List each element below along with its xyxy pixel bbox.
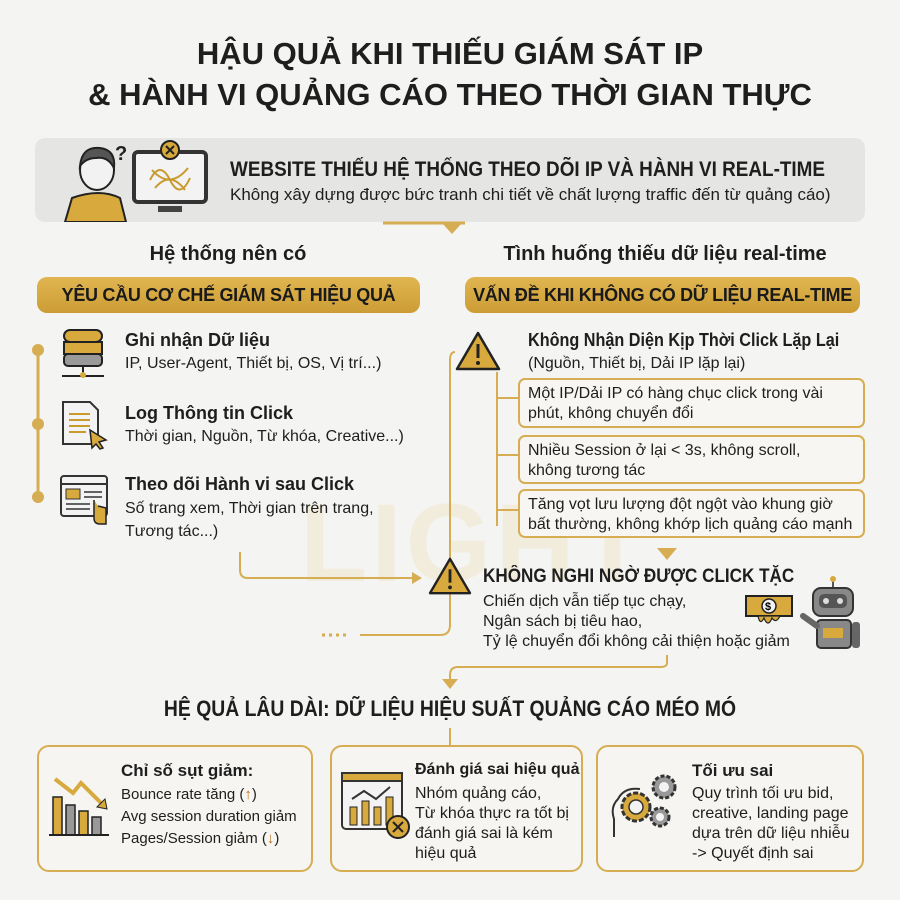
card: metrics decline: Chỉ số sụt giảm: <box>121 761 253 780</box>
box: short sessions: không tương tác <box>528 462 645 479</box>
box: traffic spikes <box>518 489 865 538</box>
icon: head with gears <box>612 774 676 837</box>
item: data logging <box>62 329 381 378</box>
heading: long-term consequences: HỆ QUẢ LÂU DÀI: DỮ LIỆU HIỆU SUẤT QUẢNG CÁO MÉO MÓ <box>164 696 736 721</box>
heading: right column: Tình huống thiếu dữ liệu real-time <box>503 243 827 265</box>
card: wrong optimisation: creative, landing page <box>692 805 849 822</box>
card: wrong evaluation: Nhóm quảng cáo, <box>415 785 541 802</box>
icon: warning <box>456 332 500 370</box>
watermark: LIGHT <box>300 482 650 605</box>
icon: confused person: ? <box>115 143 127 165</box>
item: repeated click detection: (Nguồn, Thiết bị, Dải IP lặp lại) <box>528 355 745 372</box>
block: click fraud not suspected <box>428 558 794 650</box>
item: data logging: IP, User-Agent, Thiết bị, OS, Vị trí...) <box>125 355 381 372</box>
icon: melting money: $ <box>765 601 771 613</box>
item: click logging <box>62 401 404 450</box>
item: post-click behaviour: Theo dõi Hành vi sau Click <box>125 474 354 494</box>
icon: browser with hand <box>60 475 108 525</box>
block: click fraud not suspected: Chiến dịch vẫn tiếp tục chạy, <box>483 593 686 610</box>
box: many clicks per IP: phút, không chuyển đổi <box>528 405 693 422</box>
block: click fraud not suspected: Ngân sách bị tiêu hao, <box>483 613 642 630</box>
icon: confused person <box>64 143 127 222</box>
card: wrong optimisation: dựa trên dữ liệu nhiễu <box>692 825 850 842</box>
item: click logging: Thời gian, Nguồn, Từ khóa, Creative...) <box>125 428 404 445</box>
box: many clicks per IP: Một IP/Dải IP có hàng chục click trong vài <box>528 385 823 402</box>
icon: monitor with tangled lines <box>132 140 208 212</box>
box: traffic spikes: bất thường, không khớp lịch quảng cáo mạnh <box>528 516 852 533</box>
card: wrong optimisation: Tối ưu sai <box>692 761 773 780</box>
item: repeated click detection: Không Nhận Diện Kịp Thời Click Lặp Lại <box>528 330 839 350</box>
connector to consequences <box>442 655 668 689</box>
item: repeated click detection <box>456 330 839 372</box>
card: wrong evaluation: hiệu quả <box>415 845 476 862</box>
card: wrong evaluation: Đánh giá sai hiệu quả <box>415 761 579 778</box>
icon: melting money <box>745 595 793 624</box>
block: click fraud not suspected: Tỷ lệ chuyển đổi không cải thiện hoặc giảm <box>483 633 790 650</box>
icon: warning <box>428 558 472 594</box>
connector under banner <box>383 222 465 234</box>
card: metrics decline: Bounce rate tăng (↑) <box>121 786 257 803</box>
connectors <box>32 344 677 636</box>
title: & HÀNH VI QUẢNG CÁO THEO THỜI GIAN THỰC <box>88 77 812 112</box>
item: post-click behaviour: Tương tác...) <box>125 523 218 540</box>
card: metrics decline: Pages/Session giảm (↓) <box>121 830 279 847</box>
card: wrong optimisation <box>596 745 864 872</box>
icon: dashboard with x <box>341 772 410 839</box>
banner: website lacks tracking <box>35 138 865 222</box>
card: wrong optimisation: Quy trình tối ưu bid, <box>692 785 833 802</box>
box: short sessions <box>518 435 865 484</box>
card: wrong evaluation <box>330 745 583 872</box>
title: HẬU QUẢ KHI THIẾU GIÁM SÁT IP <box>197 36 703 71</box>
item: post-click behaviour: Số trang xem, Thời gian trên trang, <box>125 500 374 517</box>
icon: database <box>62 329 104 378</box>
pill: left: YÊU CẦU CƠ CHẾ GIÁM SÁT HIỆU QUẢ <box>62 285 395 305</box>
card: wrong optimisation: -> Quyết định sai <box>692 845 813 862</box>
icon: document with cursor <box>62 401 108 450</box>
pill: right <box>465 277 860 313</box>
icon: robot <box>800 576 860 649</box>
box: many clicks per IP <box>518 378 865 428</box>
title <box>88 36 812 112</box>
card: wrong evaluation: Từ khóa thực ra tốt bị <box>415 805 569 822</box>
card: metrics decline: Avg session duration giảm <box>121 808 297 825</box>
banner: website lacks tracking: Không xây dựng được bức tranh chi tiết về chất lượng traffic đến từ quảng cáo) <box>230 185 831 204</box>
card: metrics decline <box>37 745 313 872</box>
item: post-click behaviour <box>60 474 374 540</box>
box: short sessions: Nhiều Session ở lại < 3s, không scroll, <box>528 442 800 459</box>
pill: left <box>37 277 420 313</box>
block: click fraud not suspected: KHÔNG NGHI NGỜ ĐƯỢC CLICK TẶC <box>483 566 794 587</box>
box: traffic spikes: Tăng vọt lưu lượng đột ngột vào khung giờ <box>528 496 833 513</box>
item: data logging: Ghi nhận Dữ liệu <box>125 330 270 350</box>
card: wrong evaluation: đánh giá sai là kém <box>415 825 553 842</box>
icon: declining bar chart <box>49 777 109 836</box>
item: click logging: Log Thông tin Click <box>125 403 293 423</box>
banner: website lacks tracking: WEBSITE THIẾU HỆ THỐNG THEO DÕI IP VÀ HÀNH VI REAL-TIME <box>230 158 825 181</box>
heading: left column: Hệ thống nên có <box>150 243 306 265</box>
pill: right: VẤN ĐỀ KHI KHÔNG CÓ DỮ LIỆU REAL-TIME <box>473 285 852 305</box>
